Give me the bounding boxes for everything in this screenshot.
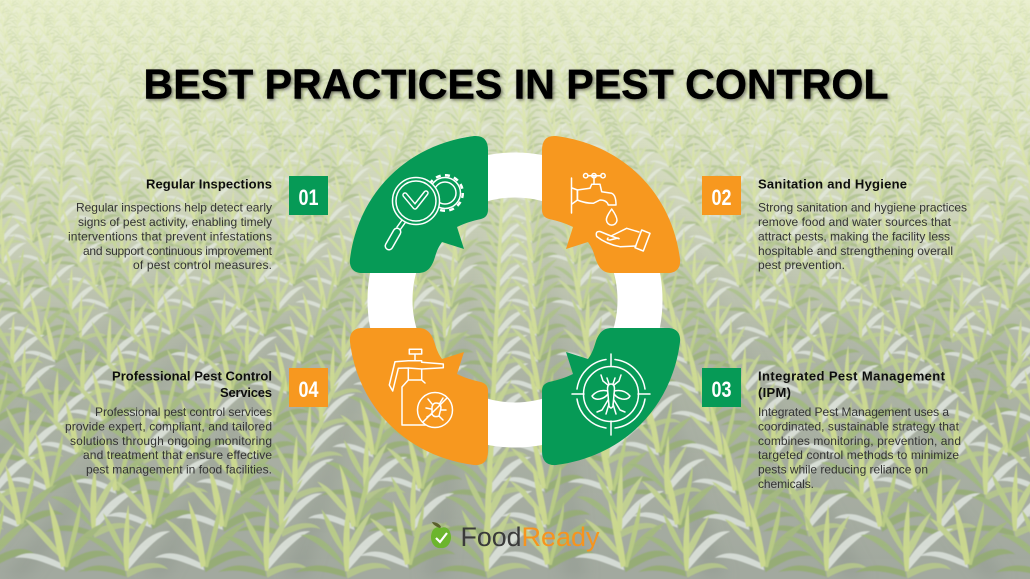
text block: professional pest control services: Services [220,385,272,400]
text block: integrated pest management: pests while reducing reliance on [758,462,928,476]
text block: sanitation and hygiene: Strong sanitation and hygiene practices [758,200,967,214]
text block: regular inspections: Regular inspections help detect early [76,200,272,214]
text block: regular inspections: of pest control measures. [133,258,272,272]
text block: integrated pest management: combines monitoring, prevention, and [758,434,961,448]
text block: professional pest control services: solutions through ongoing monitoring [70,434,272,448]
text block: integrated pest management: Integrated Pest Management uses a [758,405,949,419]
step number 03: 03 [712,377,732,402]
step number 04: 04 [298,377,319,402]
text block: professional pest control services: pest management in food facilities. [86,462,272,476]
text block: regular inspections: Regular Inspections [146,176,272,192]
panel: green segment 03 [542,328,680,465]
text block: regular inspections [68,176,273,272]
step number 01: 01 [298,185,318,210]
text block: integrated pest management: coordinated, sustainable strategy that [758,420,960,434]
panel: orange segment 02 [542,136,680,273]
icon: pump sprayer with crossed-out bug [389,349,452,428]
text block: integrated pest management [758,368,961,491]
text block: sanitation and hygiene: hospitable and strengthening overall [758,244,953,258]
text block: regular inspections: interventions that prevent infestations [68,230,272,244]
step number 03 [702,368,741,407]
icon: magnifier with gear and check mark [389,175,463,246]
title: BEST PRACTICES IN PEST CONTROL [144,60,888,108]
text block: professional pest control services: and treatment that ensure effective [83,448,272,462]
text block: professional pest control services: Professional pest control services [95,405,272,419]
central white ring [390,175,640,425]
text block: professional pest control services: Professional Pest Control [112,368,272,384]
text block: sanitation and hygiene: remove food and water sources that [758,215,952,229]
text block: sanitation and hygiene: pest prevention. [758,258,845,272]
text block: integrated pest management: chemicals. [758,477,814,491]
logo: FoodReady: Food [460,522,522,552]
text block: professional pest control services [65,368,272,476]
text block: sanitation and hygiene [758,176,967,272]
text block: integrated pest management: targeted control methods to minimize [758,448,959,462]
text block: integrated pest management: (IPM) [758,385,791,400]
logo: FoodReady [431,522,600,552]
icon: crosshair target with mosquito [572,354,650,435]
panel: green segment 01 [350,136,488,273]
text block: integrated pest management: Integrated Pest Management [758,368,946,384]
step number 02: 02 [712,185,732,210]
text block: sanitation and hygiene: Sanitation and Hygiene [758,176,907,192]
step number 04 [289,368,328,407]
step number 02 [702,176,741,215]
text block: sanitation and hygiene: attract pests, making the facility less [758,230,950,244]
icon: dripping tap and hand [572,174,650,251]
step number 01 [289,176,328,215]
text block: regular inspections: signs of pest activity, enabling timely [78,215,272,229]
text block: professional pest control services: provide expert, compliant, and tailored [65,420,272,434]
panel: orange segment 04 [350,328,488,465]
logo: FoodReady: Ready [522,522,600,552]
text block: regular inspections: and support continuous improvement [83,244,273,258]
